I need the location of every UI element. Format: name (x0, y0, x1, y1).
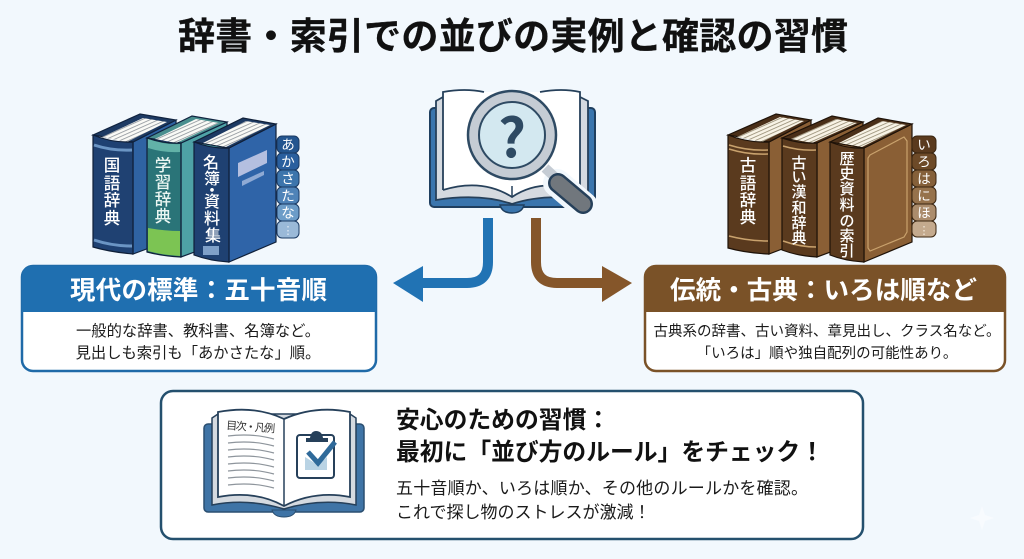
icon: modern blue books (93, 114, 299, 262)
book: 学習辞典: 学 (155, 152, 171, 176)
tabs: いろはにほ: は (917, 168, 931, 188)
book: 名簿・資料集: 集 (205, 222, 221, 246)
book: 古語辞典: 語 (740, 170, 756, 194)
book: 古い漢和辞典: 和 (791, 197, 807, 218)
tabs: いろはにほ: ほ (917, 202, 931, 222)
text: classic description: 「いろは」順や独自配列の可能性あり。 (697, 342, 957, 363)
book: 国語辞典: 典 (104, 205, 120, 229)
book: 古語辞典 (728, 114, 811, 254)
book: 学習辞典: 辞 (155, 186, 171, 210)
book: 歴史資料の索引: 料 (839, 194, 855, 215)
book: 古語辞典: 典 (740, 204, 756, 228)
book: 国語辞典: 語 (104, 170, 120, 194)
icon: sparkle (970, 506, 994, 530)
title: 辞書・索引での並びの実例と確認の習慣 (178, 6, 848, 60)
icon: clipboard check (297, 431, 335, 478)
tabs: あかさたな: た (281, 184, 295, 204)
tabs: いろはにほ: ⋮ (918, 222, 930, 238)
tabs: いろはにほ (912, 134, 936, 238)
book: 歴史資料の索引: 索 (839, 225, 855, 246)
book: 歴史資料の索引: 歴 (839, 148, 855, 169)
book: 歴史資料の索引: の (839, 210, 855, 231)
icon: open book with checklist (204, 410, 364, 517)
book: 古い漢和辞典: 古 (791, 152, 807, 173)
book: 名簿・資料集 (194, 118, 276, 262)
tabs: あかさたな: あ (281, 134, 295, 154)
arrow: brown to right (536, 218, 632, 302)
icon: classic brown books (728, 114, 936, 262)
panel: modern standard (22, 266, 376, 371)
book: 国語辞典: 辞 (104, 187, 120, 211)
icon: open book with magnifier (430, 90, 595, 213)
book: 学習辞典: 習 (155, 169, 171, 193)
book: 歴史資料の索引: 史 (839, 163, 855, 184)
book: 国語辞典: 国 (104, 152, 120, 176)
text: habit description: 五十音順か、いろは順か、その他のルールかを確認。 (396, 474, 808, 499)
book: 古語辞典: 古 (740, 152, 756, 176)
book: 古語辞典: 辞 (740, 187, 756, 211)
book: 名簿・資料集: ・ (204, 177, 220, 201)
text: habit description: これで探し物のストレスが激減！ (396, 498, 650, 523)
label: 目次・凡例: 目次・凡例 (226, 417, 276, 436)
text: classic description: 古典系の辞書、古い資料、章見出し、クラス名など。 (654, 320, 1000, 341)
arrow: blue to left (393, 218, 488, 302)
tabs: あかさたな: か (281, 150, 295, 170)
book: 古い漢和辞典: 漢 (791, 181, 807, 202)
book: 歴史資料の索引: 引 (839, 240, 855, 261)
heading: 現代の標準: 現代の標準：五十音順 (70, 270, 327, 307)
book: 名簿・資料集: 名 (203, 149, 219, 173)
heading: habit: 安心のための習慣： (396, 400, 610, 435)
magnifier handle (545, 168, 584, 206)
book: 古い漢和辞典: 辞 (791, 212, 807, 233)
book: 名簿・資料集: 料 (204, 205, 220, 229)
book: 歴史資料の索引: 資 (839, 178, 855, 199)
tabs: あかさたな: な (281, 202, 295, 222)
tabs: いろはにほ: に (917, 184, 931, 204)
book: 学習辞典 (147, 116, 227, 257)
icon: open book with magnifier: ? (498, 94, 526, 173)
book: 古い漢和辞典 (782, 116, 863, 257)
panel: checking habit (161, 391, 863, 539)
book: 学習辞典: 典 (155, 203, 171, 227)
tabs: いろはにほ: ろ (917, 150, 931, 170)
tabs: あかさたな: ⋮ (282, 222, 294, 238)
tabs: あかさたな (277, 134, 299, 238)
tabs: あかさたな: さ (281, 168, 295, 188)
text: modern description: 一般的な辞書、教科書、名簿など。 (76, 319, 320, 341)
heading: habit: 最初に「並び方のルール」をチェック！ (396, 432, 824, 467)
text: modern description: 見出しも索引も「あかさたな」順。 (76, 341, 320, 363)
heading: 伝統・古典: 伝統・古典：いろは順など (670, 270, 977, 307)
book: 古い漢和辞典: 典 (791, 227, 807, 248)
panel: traditional classics (645, 266, 1005, 371)
book: 古い漢和辞典: い (791, 166, 807, 187)
book: 国語辞典 (93, 114, 176, 254)
tabs: いろはにほ: い (917, 134, 931, 154)
book: 名簿・資料集: 資 (204, 188, 220, 212)
book: 歴史資料の索引 (830, 118, 912, 262)
book: 名簿・資料集: 簿 (204, 165, 220, 189)
